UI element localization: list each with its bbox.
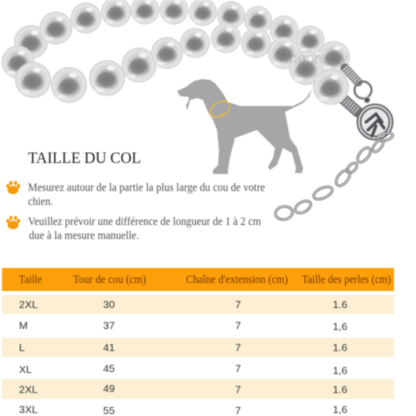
table header: Chaîne d'extension (cm) xyxy=(186,274,288,286)
row: 2XL 30: 1.6 xyxy=(333,299,347,311)
icon: paw 1 xyxy=(6,181,20,194)
row: 2XL 49: 1.6 xyxy=(333,384,347,396)
row: 3XL 55: 1,6 xyxy=(333,404,347,416)
collar ring xyxy=(207,98,233,120)
size table xyxy=(2,268,394,416)
row: XL 45: XL xyxy=(19,364,32,376)
instruction 2: Veuillez prévoir une différence de longueur de 1 à 2 cm xyxy=(28,216,261,228)
row: XL 45: 1,6 xyxy=(333,365,347,377)
instruction 1: chien. xyxy=(28,196,53,208)
row stripes xyxy=(2,295,394,399)
clasp ring xyxy=(359,106,391,138)
instruction 2 xyxy=(28,216,261,242)
row: L 41 xyxy=(19,342,347,354)
row: XL 45: 45 xyxy=(103,363,115,375)
row: 2XL 30: 30 xyxy=(103,299,115,311)
row: 2XL 49 xyxy=(19,383,347,396)
upper spring xyxy=(345,68,358,82)
row: 2XL 30: 7 xyxy=(235,299,241,311)
row: 2XL 30 xyxy=(19,299,347,311)
row: L 41: 7 xyxy=(235,342,241,354)
row: L 41: L xyxy=(19,342,25,354)
last pearl xyxy=(313,69,349,105)
watermark: Hoopreety xyxy=(278,50,348,67)
icon: paw 2 xyxy=(6,216,20,229)
pearl necklace xyxy=(2,0,350,103)
row: 3XL 55: 3XL xyxy=(19,404,38,416)
row: M 37 xyxy=(19,320,347,333)
row: 2XL 49: 49 xyxy=(103,383,115,395)
row: L 41: 1.6 xyxy=(333,342,347,354)
row: XL 45: 7 xyxy=(235,363,241,375)
title: TAILLE DU COL xyxy=(28,150,141,167)
row: L 41: 41 xyxy=(103,342,115,354)
dog silhouette with collar xyxy=(177,79,312,174)
chain links xyxy=(275,132,394,221)
row: 2XL 49: 2XL xyxy=(19,384,38,396)
row: M 37: M xyxy=(19,320,28,332)
instruction 1 xyxy=(28,182,265,208)
instruction 1: Mesurez autour de la partie la plus large du cou de votre xyxy=(28,182,265,194)
table header: Taille des perles (cm) xyxy=(302,274,391,286)
instruction 2: due à la mesure manuelle. xyxy=(29,230,139,242)
dog body xyxy=(177,79,312,174)
row: XL 45 xyxy=(19,363,347,377)
row: 2XL 30: 2XL xyxy=(19,299,38,311)
lower barrel xyxy=(341,97,358,112)
row: M 37: 7 xyxy=(235,320,241,332)
table header: Tour de cou (cm) xyxy=(73,274,146,286)
row: 3XL 55 xyxy=(19,404,347,416)
clasp and extension chain xyxy=(275,68,394,221)
row: M 37: 1,6 xyxy=(333,321,347,333)
row: M 37: 37 xyxy=(103,320,115,332)
table header: Taille xyxy=(19,274,42,286)
small ring xyxy=(354,82,372,98)
row: 2XL 49: 7 xyxy=(235,384,241,396)
table header xyxy=(2,268,394,291)
